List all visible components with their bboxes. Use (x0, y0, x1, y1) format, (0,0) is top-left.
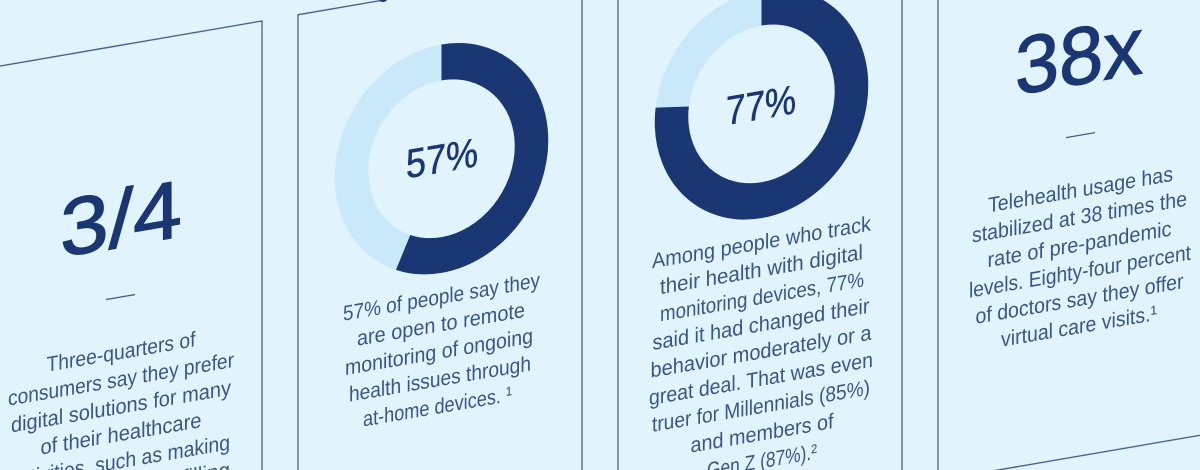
big number: 38x: 38x (1015, 0, 1143, 113)
description text (343, 268, 541, 435)
description text: of doctors say they offer (975, 270, 1184, 329)
description text: great deal. That was even (649, 348, 873, 410)
description text: of their healthcare (40, 409, 202, 460)
big number: 3/4: 3/4 (60, 162, 182, 275)
description text: their health with digital (660, 241, 863, 299)
panel: three-quarters (0, 21, 262, 470)
description text: digital solutions for many (11, 376, 232, 438)
panel frame (298, 0, 582, 470)
donut value: 77%: 77% (726, 77, 796, 134)
description text: truer for Millennials (85%) (652, 376, 870, 437)
description text: Three-quarters of (46, 328, 196, 377)
cropped mark at top edge (379, 0, 387, 2)
donut chart: 57% (352, 47, 532, 270)
description text: virtual care visits.¹ (1001, 301, 1157, 352)
description text: levels. Eighty-four percent (969, 241, 1191, 303)
description text: at-home devices. ¹ (363, 382, 512, 432)
donut value: 57%: 57% (406, 130, 478, 188)
description text: stabilized at 38 times the (972, 187, 1187, 248)
panel: 38x (938, 0, 1200, 470)
panel: 77 percent (618, 0, 902, 470)
panel frame (0, 21, 262, 470)
description text: health issues through (349, 352, 531, 407)
description text: consumers say they prefer (8, 348, 234, 411)
description text: are open to remote (357, 298, 525, 351)
description text: and members of (691, 410, 834, 458)
description text: behavior moderately or a (650, 321, 872, 383)
donut chart: 77% (672, 0, 852, 216)
description text: Among people who track (652, 212, 872, 273)
description text: monitoring devices, 77% (660, 268, 864, 327)
panel frame (618, 0, 902, 470)
panel: 57 percent (298, 0, 582, 470)
description text: said it had changed their (652, 294, 870, 355)
description text: 57% of people say they (343, 268, 541, 326)
description text (969, 159, 1191, 357)
description text: monitoring of ongoing (345, 324, 533, 380)
description text (649, 212, 873, 470)
description text: Telehealth usage has (988, 162, 1173, 218)
description text (8, 321, 234, 470)
description text: rate of pre-pandemic (987, 217, 1171, 272)
panel frame (938, 0, 1200, 470)
